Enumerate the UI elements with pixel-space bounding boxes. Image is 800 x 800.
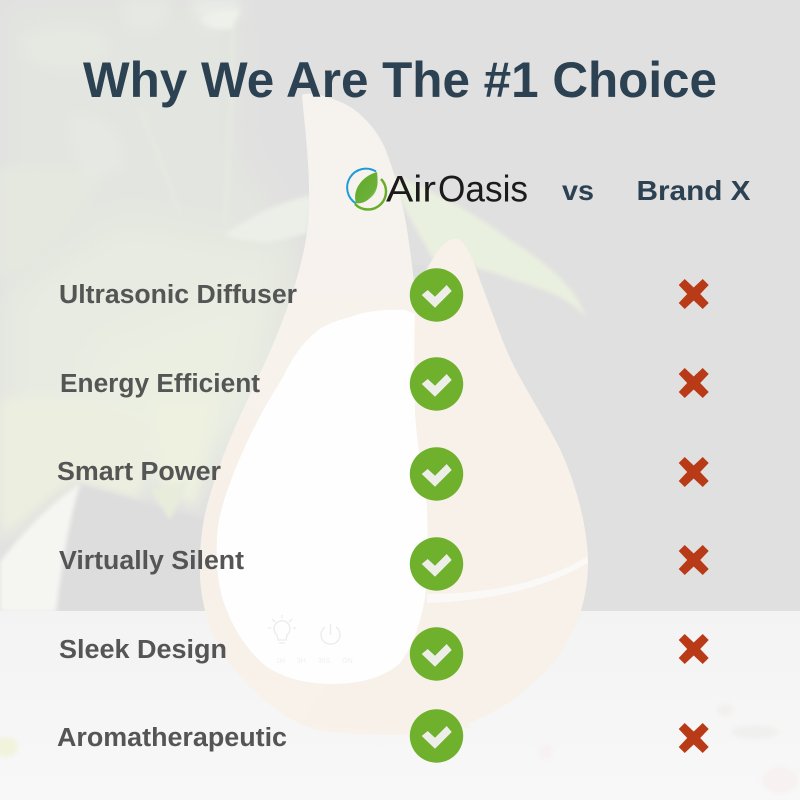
logo leaf xyxy=(355,172,378,203)
cross icon row 2 xyxy=(679,368,709,398)
row label: Aromatherapeutic: Aromatherapeutic xyxy=(57,724,287,752)
row label: Ultrasonic Diffuser: Ultrasonic Diffuser xyxy=(59,281,297,309)
diffuser light ring xyxy=(427,557,588,603)
diffuser touch icons: 1H 3H 30S ON xyxy=(276,658,353,665)
check icon row 1 xyxy=(410,268,463,322)
check icon row 6 xyxy=(410,709,463,763)
diffuser body right shell xyxy=(300,239,588,733)
diffuser body left shell xyxy=(200,94,470,735)
row label: Energy Efficient: Energy Efficient xyxy=(60,370,261,398)
cross icon row 1 xyxy=(679,279,709,309)
check icon row 5 xyxy=(410,627,463,681)
cross icon row 5 xyxy=(679,634,709,664)
logo wordmark: Air xyxy=(386,168,436,210)
cross icon row 6 xyxy=(679,723,709,753)
Air Oasis logo xyxy=(347,168,528,210)
logo wordmark: Oasis xyxy=(438,168,528,210)
row label: Sleek Design: Sleek Design xyxy=(59,636,227,664)
cross icon row 4 xyxy=(679,545,709,575)
title: Why We Are The #1 Choice xyxy=(83,52,717,108)
diffuser touch icons xyxy=(268,615,353,665)
Brand X label: Brand X xyxy=(636,175,751,206)
diffuser illustration xyxy=(200,94,588,735)
check icon row 3 xyxy=(410,447,463,501)
cross icon row 3 xyxy=(679,457,709,487)
check icon row 2 xyxy=(410,357,463,411)
row label: Smart Power: Smart Power xyxy=(57,458,221,486)
row label: Virtually Silent: Virtually Silent xyxy=(59,547,245,575)
logo ring xyxy=(347,169,376,204)
diffuser white panel xyxy=(217,310,428,684)
vs label: vs xyxy=(562,175,594,206)
check icon row 4 xyxy=(410,537,463,591)
